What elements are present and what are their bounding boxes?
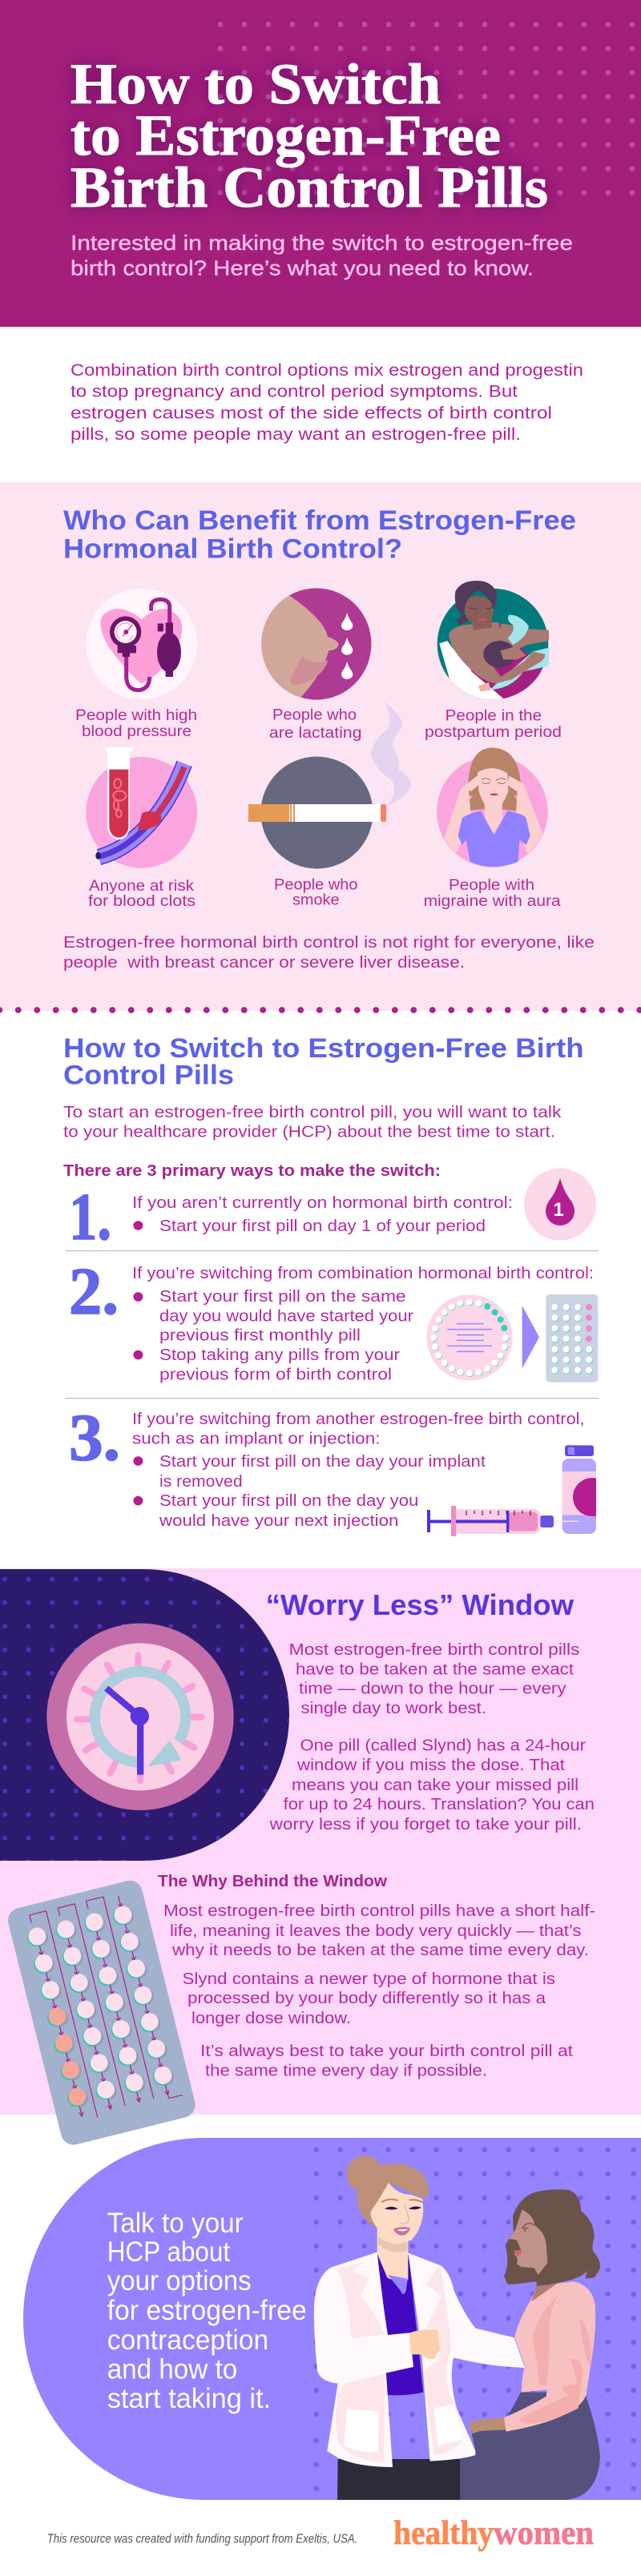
- label: high blood pressure: People with high: [75, 707, 197, 724]
- logo: women: [494, 2515, 594, 2552]
- subtitle: [71, 231, 573, 280]
- icon: vial: [562, 1445, 596, 1534]
- label: migraine: People with: [449, 877, 534, 894]
- step 1: 1.: [69, 1180, 111, 1254]
- panel: talk to your HCP: [23, 2138, 641, 2500]
- callout text: for estrogen-free: [107, 2295, 307, 2326]
- icon: cigarette: [248, 702, 411, 868]
- logo: healthy: [393, 2515, 494, 2552]
- heading: Who Can Benefit from Estrogen-Free: [63, 505, 576, 536]
- heading: How to Switch to Estrogen-Free Birth: [63, 1033, 584, 1064]
- subtitle: Interested in making the switch to estrogen-free: [71, 231, 573, 255]
- callout text: HCP about: [107, 2236, 230, 2268]
- step 2: [69, 1254, 598, 1384]
- text block: Slynd contains a newer type of hormone that is: [183, 1970, 555, 1988]
- logo: [393, 2515, 594, 2552]
- intro paragraph: estrogen causes most of the side effects of birth control: [71, 404, 552, 422]
- text block: worry less if you forget to take your pill.: [269, 1816, 582, 1833]
- icon: clock: [46, 1624, 234, 1810]
- subheading: There are 3 primary ways to make the switch:: [63, 1162, 441, 1180]
- note text: [63, 933, 595, 972]
- text block: processed by your body differently so it has a: [187, 1990, 546, 2007]
- text block: the same time every day if possible.: [205, 2062, 487, 2079]
- label: blood clots: [88, 878, 196, 910]
- text block: single day to work best.: [301, 1700, 486, 1717]
- step 2: day you would have started your: [159, 1307, 413, 1325]
- label: lactating: are lactating: [269, 725, 362, 742]
- step 2: previous first monthly pill: [159, 1327, 361, 1345]
- step 1: [69, 1169, 596, 1254]
- text block: longer dose window.: [191, 2010, 351, 2027]
- label: lactating: People who: [272, 706, 357, 723]
- icon: postpartum: [437, 581, 550, 701]
- icon: period drop: 1: [553, 1199, 564, 1221]
- text block: [269, 1641, 595, 1833]
- intro text: To start an estrogen-free birth control pill, you will want to talk: [63, 1104, 562, 1121]
- icon: blood clots: [86, 747, 197, 868]
- panel: who can benefit: [0, 482, 641, 1011]
- callout text: [107, 2208, 307, 2414]
- icon: blood pressure: [86, 589, 197, 699]
- icon: pill packs: [426, 1294, 598, 1383]
- intro text: [63, 1104, 562, 1141]
- icon: pill pack: [6, 1878, 198, 2147]
- text block: have to be taken at the same exact: [296, 1661, 574, 1679]
- icon: lactating: [261, 588, 372, 700]
- text block: window if you miss the dose. That: [296, 1757, 565, 1774]
- intro text: to your healthcare provider (HCP) about the best time to start.: [63, 1124, 555, 1141]
- icon: syringe: [427, 1506, 579, 1536]
- title: [71, 52, 548, 219]
- step 3: If you’re switching from another estrogen-free birth control,: [132, 1411, 585, 1428]
- step 3: Start your first pill on the day your implant: [159, 1453, 486, 1471]
- step 3: would have your next injection: [159, 1512, 398, 1530]
- text block: time — down to the hour — every: [299, 1680, 566, 1698]
- label: blood clots: for blood clots: [88, 893, 196, 910]
- text block: Most estrogen-free birth control pills have a short half-: [163, 1902, 595, 1920]
- heading: Control Pills: [63, 1061, 234, 1091]
- footer note: This resource was created with funding support from Exeltis, USA.: [47, 2532, 357, 2546]
- illustration: patient: [460, 2189, 600, 2500]
- callout text: start taking it.: [107, 2383, 271, 2414]
- callout text: your options: [107, 2265, 252, 2296]
- label: postpartum: [425, 708, 562, 741]
- heading: “Worry Less” Window: [266, 1588, 574, 1621]
- text block: why it needs to be taken at the same time every day.: [171, 1942, 589, 1959]
- note text: people with breast cancer or severe liver disease.: [63, 953, 465, 972]
- panel: worry less window: [0, 1568, 641, 2147]
- callout text: contraception: [107, 2324, 268, 2356]
- header banner: [0, 0, 641, 327]
- text block: for up to 24 hours. Translation? You can: [284, 1796, 595, 1813]
- text block: [163, 1902, 595, 2079]
- step 2: If you’re switching from combination hormonal birth control:: [132, 1265, 594, 1282]
- callout text: and how to: [107, 2353, 237, 2385]
- label: migraine: migraine with aura: [424, 893, 561, 910]
- label: postpartum: People in the: [445, 708, 542, 725]
- text block: means you can take your missed pill: [292, 1777, 579, 1794]
- text block: It’s always best to take your birth control pill at: [200, 2043, 573, 2060]
- text block: One pill (called Slynd) has a 24-hour: [300, 1737, 586, 1755]
- title: Birth Control Pills: [71, 155, 548, 219]
- step 2: previous form of birth control: [159, 1366, 392, 1384]
- label: lactating: [269, 706, 362, 742]
- step 3: is removed: [159, 1473, 243, 1491]
- text block: life, meaning it leaves the body very quickly — that’s: [170, 1922, 582, 1940]
- step 1: If you aren’t currently on hormonal birth control:: [132, 1194, 513, 1212]
- label: smoke: smoke: [292, 892, 340, 909]
- icon: period drop: [524, 1169, 596, 1241]
- label: smoke: People who: [274, 877, 357, 894]
- intro paragraph: Combination birth control options mix estrogen and progestin: [71, 361, 583, 380]
- step 1: Start your first pill on day 1 of your period: [159, 1218, 486, 1235]
- note text: Estrogen-free hormonal birth control is not right for everyone, like: [63, 933, 595, 952]
- label: high blood pressure: [75, 707, 197, 740]
- label: blood clots: Anyone at risk: [89, 878, 195, 895]
- subtitle: birth control? Here’s what you need to know.: [71, 256, 534, 280]
- intro paragraph: pills, so some people may want an estrogen-free pill.: [71, 425, 521, 444]
- step 2: Stop taking any pills from your: [159, 1346, 400, 1364]
- text block: Most estrogen-free birth control pills: [289, 1641, 580, 1659]
- clock background shape: [0, 1569, 289, 1861]
- subheading: The Why Behind the Window: [158, 1873, 387, 1890]
- step 3: Start your first pill on the day you: [159, 1492, 418, 1510]
- panel: how to switch: [0, 1033, 641, 2552]
- step 2: 2.: [69, 1254, 119, 1329]
- heading: Hormonal Birth Control?: [63, 533, 402, 564]
- title: How to Switch: [71, 52, 441, 116]
- label: postpartum: postpartum period: [425, 724, 562, 741]
- illustration: doctor: [314, 2155, 525, 2500]
- intro paragraph: to stop pregnancy and control period symptoms. But: [71, 383, 518, 400]
- heading: [63, 1033, 584, 1091]
- step 2: Start your first pill on the same: [159, 1288, 406, 1306]
- icon: migraine: [437, 747, 548, 867]
- step 3: 3.: [69, 1401, 120, 1475]
- label: high blood pressure: blood pressure: [82, 723, 191, 740]
- step 3: such as an implant or injection:: [132, 1431, 380, 1448]
- label: migraine: [424, 877, 561, 910]
- intro paragraph: [71, 361, 583, 444]
- callout text: Talk to your: [107, 2208, 244, 2239]
- step 3: [71, 1412, 596, 1536]
- title: to Estrogen-Free: [71, 103, 501, 167]
- label: smoke: [274, 877, 357, 909]
- heading: [63, 505, 576, 564]
